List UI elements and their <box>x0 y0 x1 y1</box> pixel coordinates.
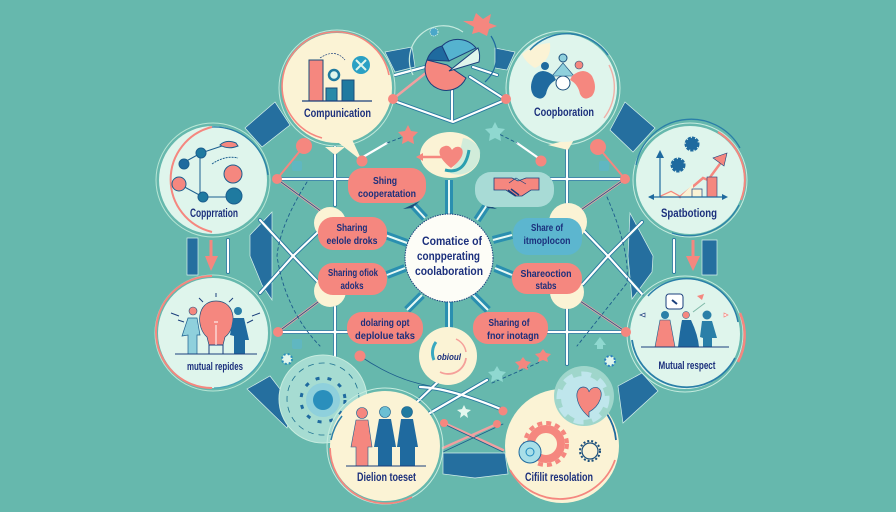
connector lines <box>228 67 674 452</box>
node: mutual repides <box>155 275 271 391</box>
pill: Sharing of fnor inotagn: Sharing of <box>488 317 530 329</box>
node: Copprration: Copprration <box>190 208 238 220</box>
icon: three people <box>346 406 426 466</box>
pill: Share of itmoplocon: Share of <box>531 222 563 234</box>
node: Dielion toeset: Dielion toeset <box>357 472 416 484</box>
top pie chart emblem <box>409 13 497 90</box>
centre hub: Comatice of <box>422 234 483 248</box>
oblout emblem below centre <box>419 327 477 385</box>
pill: Sharing ofiok adoks <box>318 263 387 295</box>
central spokes <box>385 180 512 331</box>
node: Spatbotiong <box>633 119 747 237</box>
pill: Sharing of fnor inotagn <box>473 312 548 344</box>
pill: Shing cooperation: cooperatation <box>358 188 416 200</box>
outer ring band segments <box>187 47 717 478</box>
pill: Sharing ofiok adoks: Sharing ofiok <box>328 267 378 279</box>
node: Cifilit resolation: Cifilit resolation <box>525 472 593 484</box>
decorative stars and ghost icons <box>282 122 615 418</box>
pill: Shareoction stabs <box>512 263 582 294</box>
node: Coopboration: Coopboration <box>534 107 594 119</box>
node: Compunication <box>279 30 395 161</box>
icon: gear <box>301 378 345 422</box>
pill: Shareoction stabs: stabs <box>536 280 557 292</box>
pill: Shing cooperation: Shing <box>373 175 397 187</box>
centre hub: coolaboration <box>415 264 483 278</box>
icon: node network <box>172 141 242 204</box>
cream backing discs for pills <box>314 203 587 309</box>
centre hub <box>405 214 493 302</box>
pink triangles on vertical links <box>205 240 700 271</box>
pill: Sharing eelole droks: eelole droks <box>326 235 378 247</box>
icon: handshake <box>494 178 539 196</box>
icon: gears and heart <box>519 366 614 465</box>
centre hub: conpperating <box>417 249 480 263</box>
pill: Sharing of fnor inotagn: fnor inotagn <box>487 330 539 342</box>
pill: Share of itmoplocon <box>513 218 582 255</box>
pill: Sharing ofiok adoks: adoks <box>340 280 364 292</box>
node: Cifilit resolation <box>505 366 619 503</box>
pill: Shing cooperation <box>348 168 426 203</box>
icon: growth chart <box>648 138 728 200</box>
pill: dolaring opt deplolue taks: deplolue taks <box>355 330 415 342</box>
heart emblem above centre <box>416 132 480 178</box>
node: Dielion toeset <box>327 388 443 504</box>
pill: dolaring opt deplolue taks: dolaring opt <box>360 317 410 329</box>
icon: bar chart and gear <box>302 53 372 101</box>
junction nodes <box>272 94 631 428</box>
icon: light bulb with two people <box>171 293 260 354</box>
node: faded gear <box>279 355 367 443</box>
node: Mutual respect: Mutual respect <box>658 360 716 372</box>
node: Copprration <box>156 123 270 237</box>
node: Coopboration <box>506 31 620 150</box>
oblout emblem below centre: obioul <box>437 352 461 363</box>
node: Spatbotiong: Spatbotiong <box>661 208 717 220</box>
node: mutual repides: mutual repides <box>187 361 243 373</box>
node: Mutual respect <box>627 276 745 392</box>
pill: dolaring opt deplolue taks <box>347 312 423 344</box>
node: Compunication: Compunication <box>304 108 371 120</box>
pill: Shareoction stabs: Shareoction <box>520 268 572 280</box>
pill: Sharing eelole droks <box>318 217 387 250</box>
pill: Share of itmoplocon: itmoplocon <box>524 235 570 247</box>
pill: Sharing eelole droks: Sharing <box>336 222 368 234</box>
icon: people at a table <box>531 54 595 99</box>
icon: three people with speech bubble <box>640 294 729 347</box>
pill: handshake <box>475 172 554 207</box>
